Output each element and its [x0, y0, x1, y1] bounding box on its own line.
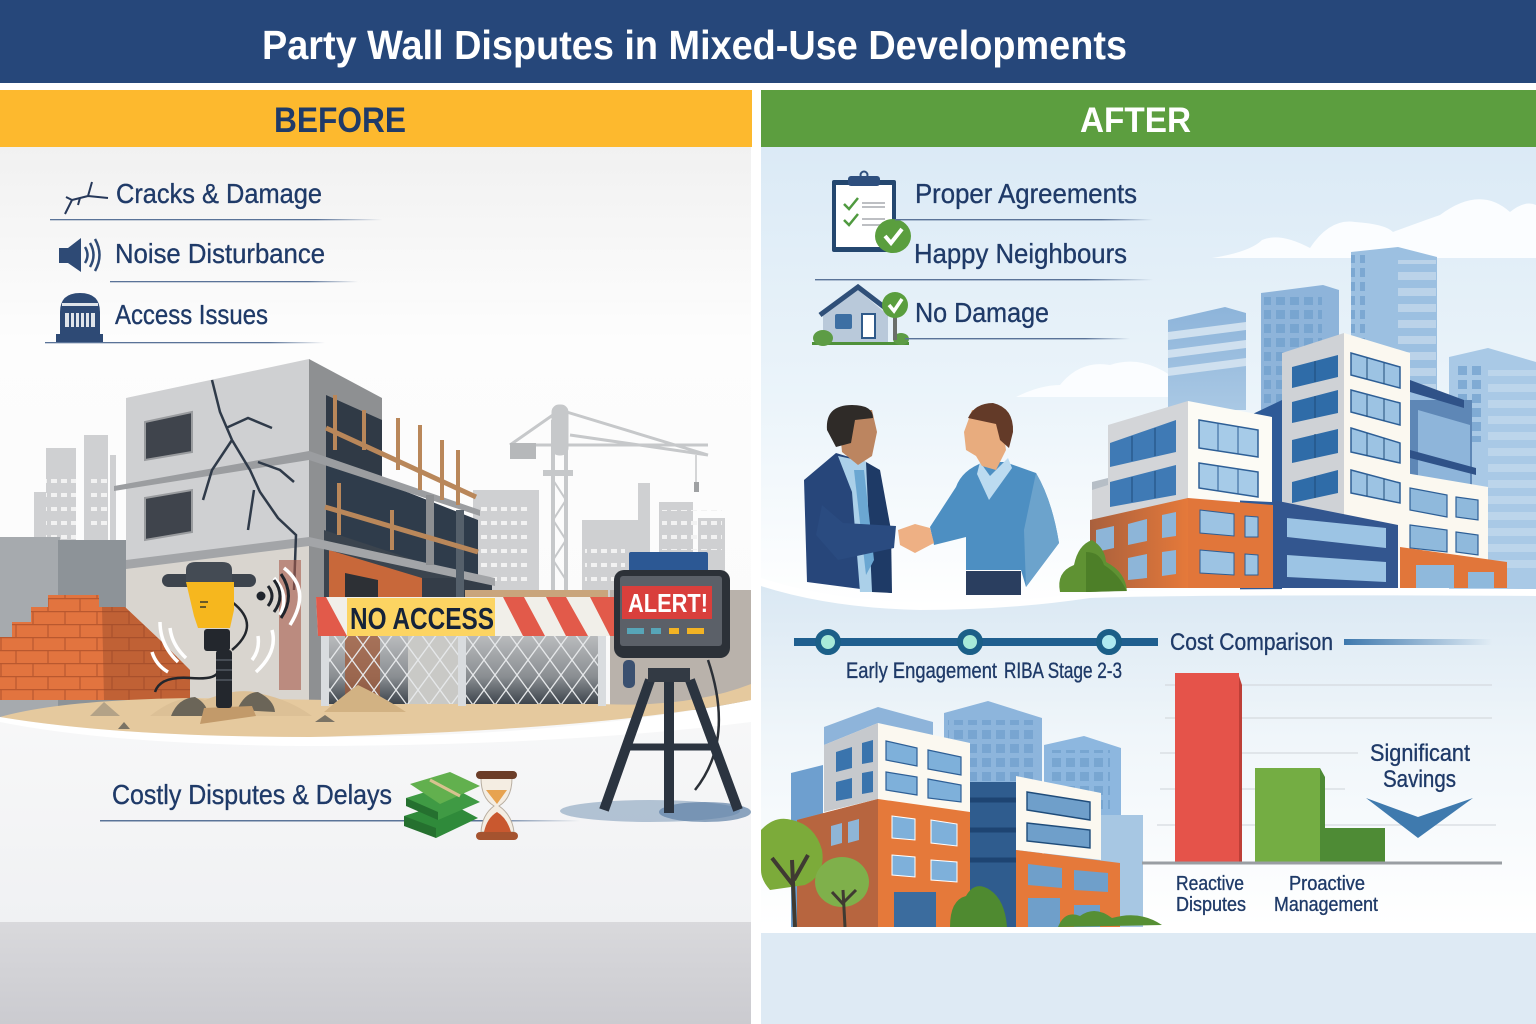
icon: speaker [59, 238, 100, 272]
right lower wing [1405, 473, 1488, 565]
panel: before [0, 90, 752, 1024]
label: proper agreements: Proper Agreements [915, 178, 1137, 209]
bar: proactive management [1255, 768, 1385, 863]
label: proactive management: Management [1274, 894, 1378, 916]
mixed-use buildings [1090, 333, 1507, 590]
label: reactive disputes: Disputes [1176, 894, 1246, 916]
alert monitor on tripod [560, 552, 751, 822]
lower trees and bushes [761, 819, 1162, 927]
label: costly disputes: Costly Disputes & Delays [112, 779, 392, 810]
sand ground [0, 700, 751, 746]
icon: cash stacks [404, 772, 480, 838]
sound waves [258, 574, 288, 618]
blue podium [1273, 500, 1398, 588]
cost comparison heading: Cost Comparison [1170, 629, 1333, 656]
alert monitor on tripod: ALERT! [628, 588, 708, 618]
rubble [90, 685, 406, 729]
cost comparison chart [1142, 673, 1502, 916]
office skyline [1168, 247, 1536, 590]
person left [804, 405, 896, 593]
vibration marks [152, 568, 300, 672]
bar: reactive disputes [1175, 673, 1242, 863]
tower crane [510, 405, 708, 590]
early engagement timeline [794, 632, 1158, 683]
label: cracks and damage: Cracks & Damage [116, 178, 322, 209]
label: proactive management [1274, 873, 1378, 916]
brick pile [0, 595, 190, 700]
panel: after [761, 90, 1536, 1024]
wave divider [761, 578, 1536, 1024]
clasped hands [898, 524, 934, 553]
icon: clipboard with check [832, 172, 911, 253]
label: happy neighbours: Happy Neighbours [914, 238, 1127, 269]
before heading band [0, 90, 752, 147]
label: access issues: Access Issues [115, 299, 268, 330]
label: noise disturbance: Noise Disturbance [115, 238, 325, 269]
bottom band [761, 927, 1536, 1024]
significant savings label: Significant [1370, 740, 1470, 767]
riba label: RIBA Stage 2-3 [1004, 658, 1122, 683]
timeline label: Early Engagement [846, 658, 997, 683]
handshake figures [804, 403, 1059, 595]
label: proactive management: Proactive [1289, 873, 1365, 895]
no access barrier: NO ACCESS [350, 601, 494, 636]
icon: hourglass [476, 771, 518, 840]
title: Party Wall Disputes in Mixed-Use Developments [262, 22, 1127, 68]
icon: crack [65, 182, 108, 214]
person right [930, 403, 1059, 595]
page header band [0, 0, 1536, 83]
construction scene [0, 359, 751, 746]
icon: gate [56, 293, 103, 342]
significant savings label: Savings [1383, 766, 1456, 793]
clouds [1016, 199, 1536, 397]
icon: house with check [812, 287, 909, 346]
significant savings label [1370, 740, 1470, 793]
lower buildings [791, 701, 1143, 927]
savings arrow [1366, 798, 1473, 838]
no access barrier [316, 590, 615, 706]
background skyline [0, 435, 751, 717]
crack [203, 380, 296, 590]
after heading band [761, 90, 1536, 147]
before heading band: BEFORE [274, 101, 406, 140]
left block [1092, 478, 1108, 522]
label: reactive disputes [1176, 873, 1246, 916]
label: reactive disputes: Reactive [1176, 873, 1244, 895]
label: no damage: No Damage [915, 297, 1049, 328]
jackhammer [155, 562, 256, 708]
green bush [1059, 540, 1127, 592]
after heading band: AFTER [1080, 101, 1191, 140]
concrete building with crack [114, 359, 495, 700]
